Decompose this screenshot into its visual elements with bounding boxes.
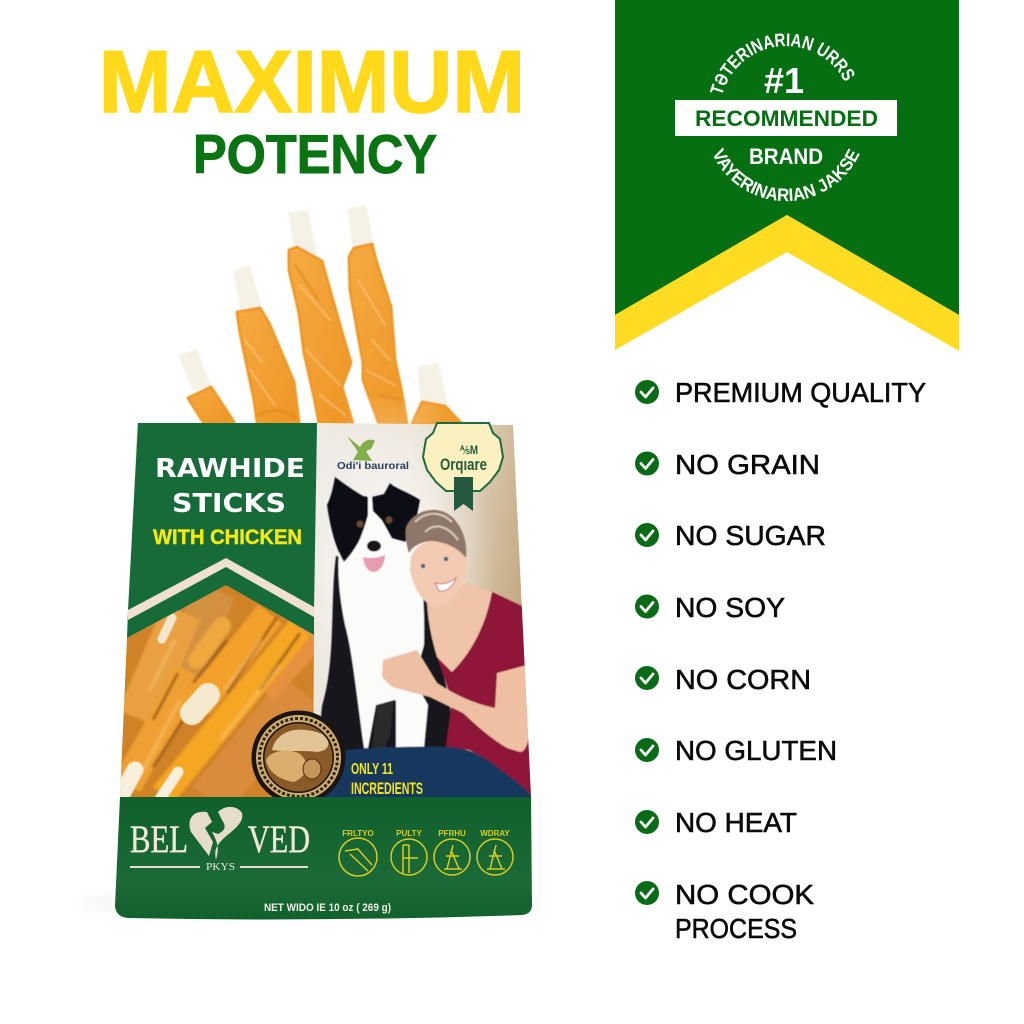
illustration: rawhide chicken sticks above bag bbox=[180, 207, 462, 424]
ingredients note: INCREDIENTS bbox=[351, 779, 423, 798]
jeans bbox=[320, 747, 533, 799]
shadow under bag bbox=[77, 893, 547, 913]
woman bbox=[382, 510, 534, 800]
logo: beloved paws: PKYS bbox=[206, 861, 235, 873]
claim: premium quality: PREMIUM QUALITY bbox=[675, 377, 926, 408]
icon: heart bbox=[189, 807, 242, 860]
panel: photo background bbox=[295, 390, 531, 797]
title: maximum potency: MAXIMUM bbox=[99, 32, 525, 131]
icon: badge three bbox=[434, 829, 470, 875]
badge: number one recommended brand bbox=[675, 34, 897, 202]
panel: recommended brand banner bbox=[615, 0, 959, 351]
product name: STICKS bbox=[172, 489, 286, 519]
seal: ingredient medallion bbox=[252, 710, 346, 804]
net weight: NET WIDO IE 10 oz ( 269 g) bbox=[264, 902, 391, 914]
badge: number one recommended brand: VAYERINARIAN JAKSE bbox=[714, 147, 860, 202]
badge: number one recommended brand: TƏTERINARIAN URRS bbox=[710, 34, 854, 93]
claim: no cook process: NO COOK bbox=[675, 879, 814, 910]
title: maximum potency bbox=[99, 32, 525, 185]
badge: organic seal: Orqıare bbox=[440, 455, 487, 474]
bag body bbox=[120, 423, 531, 800]
claim: no gluten: NO GLUTEN bbox=[675, 735, 837, 766]
list: product claims bbox=[635, 377, 926, 944]
badge: number one recommended brand: RECOMMENDED bbox=[695, 106, 878, 131]
ingredients note bbox=[351, 761, 423, 798]
title: maximum potency: POTENCY bbox=[193, 123, 437, 185]
claim: no sugar: NO SUGAR bbox=[675, 520, 826, 551]
panel: product bag bbox=[115, 390, 534, 919]
icon: badge one bbox=[339, 829, 377, 876]
icon: badge one: FRLTYO bbox=[342, 829, 374, 838]
logo: brand mark: Odi'i bauroral bbox=[337, 461, 409, 472]
dog bbox=[318, 477, 452, 752]
badge: organic seal bbox=[423, 423, 503, 511]
panel: green product label bbox=[127, 423, 317, 638]
icon: badge two: PULTY bbox=[396, 829, 422, 838]
dog head bbox=[327, 477, 368, 562]
photo: dog and owner bbox=[318, 477, 534, 800]
product name: WITH CHICKEN bbox=[153, 526, 302, 549]
claim: no cook process: PROCESS bbox=[675, 913, 797, 944]
icon: badge two bbox=[391, 829, 427, 875]
claim: no heat: NO HEAT bbox=[675, 807, 797, 838]
icon: badge four: WDRAY bbox=[480, 829, 510, 838]
panel: green bag base bbox=[115, 797, 532, 919]
badge: number one recommended brand: #1 bbox=[764, 60, 804, 101]
claim: no grain: NO GRAIN bbox=[675, 449, 820, 480]
icon: badge four bbox=[477, 829, 513, 875]
ingredients note: ONLY 11 bbox=[351, 761, 393, 778]
product name bbox=[153, 454, 305, 549]
product name: RAWHIDE bbox=[155, 454, 305, 484]
badge: organic seal: ⅍M bbox=[460, 443, 478, 457]
badge: number one recommended brand: BRAND bbox=[749, 144, 823, 169]
claim: no corn: NO CORN bbox=[675, 664, 811, 695]
logo: beloved paws bbox=[130, 807, 310, 873]
infographic canvas bbox=[104, 0, 959, 938]
logo: beloved paws: BEL bbox=[130, 818, 188, 861]
photo: chicken sticks bbox=[115, 580, 320, 800]
claim: no soy: NO SOY bbox=[675, 592, 785, 623]
logo: brand mark bbox=[337, 436, 409, 472]
logo: beloved paws: VED bbox=[248, 818, 310, 861]
claim: no cook process bbox=[635, 879, 814, 944]
icon: badge three: PFRHU bbox=[438, 829, 466, 838]
